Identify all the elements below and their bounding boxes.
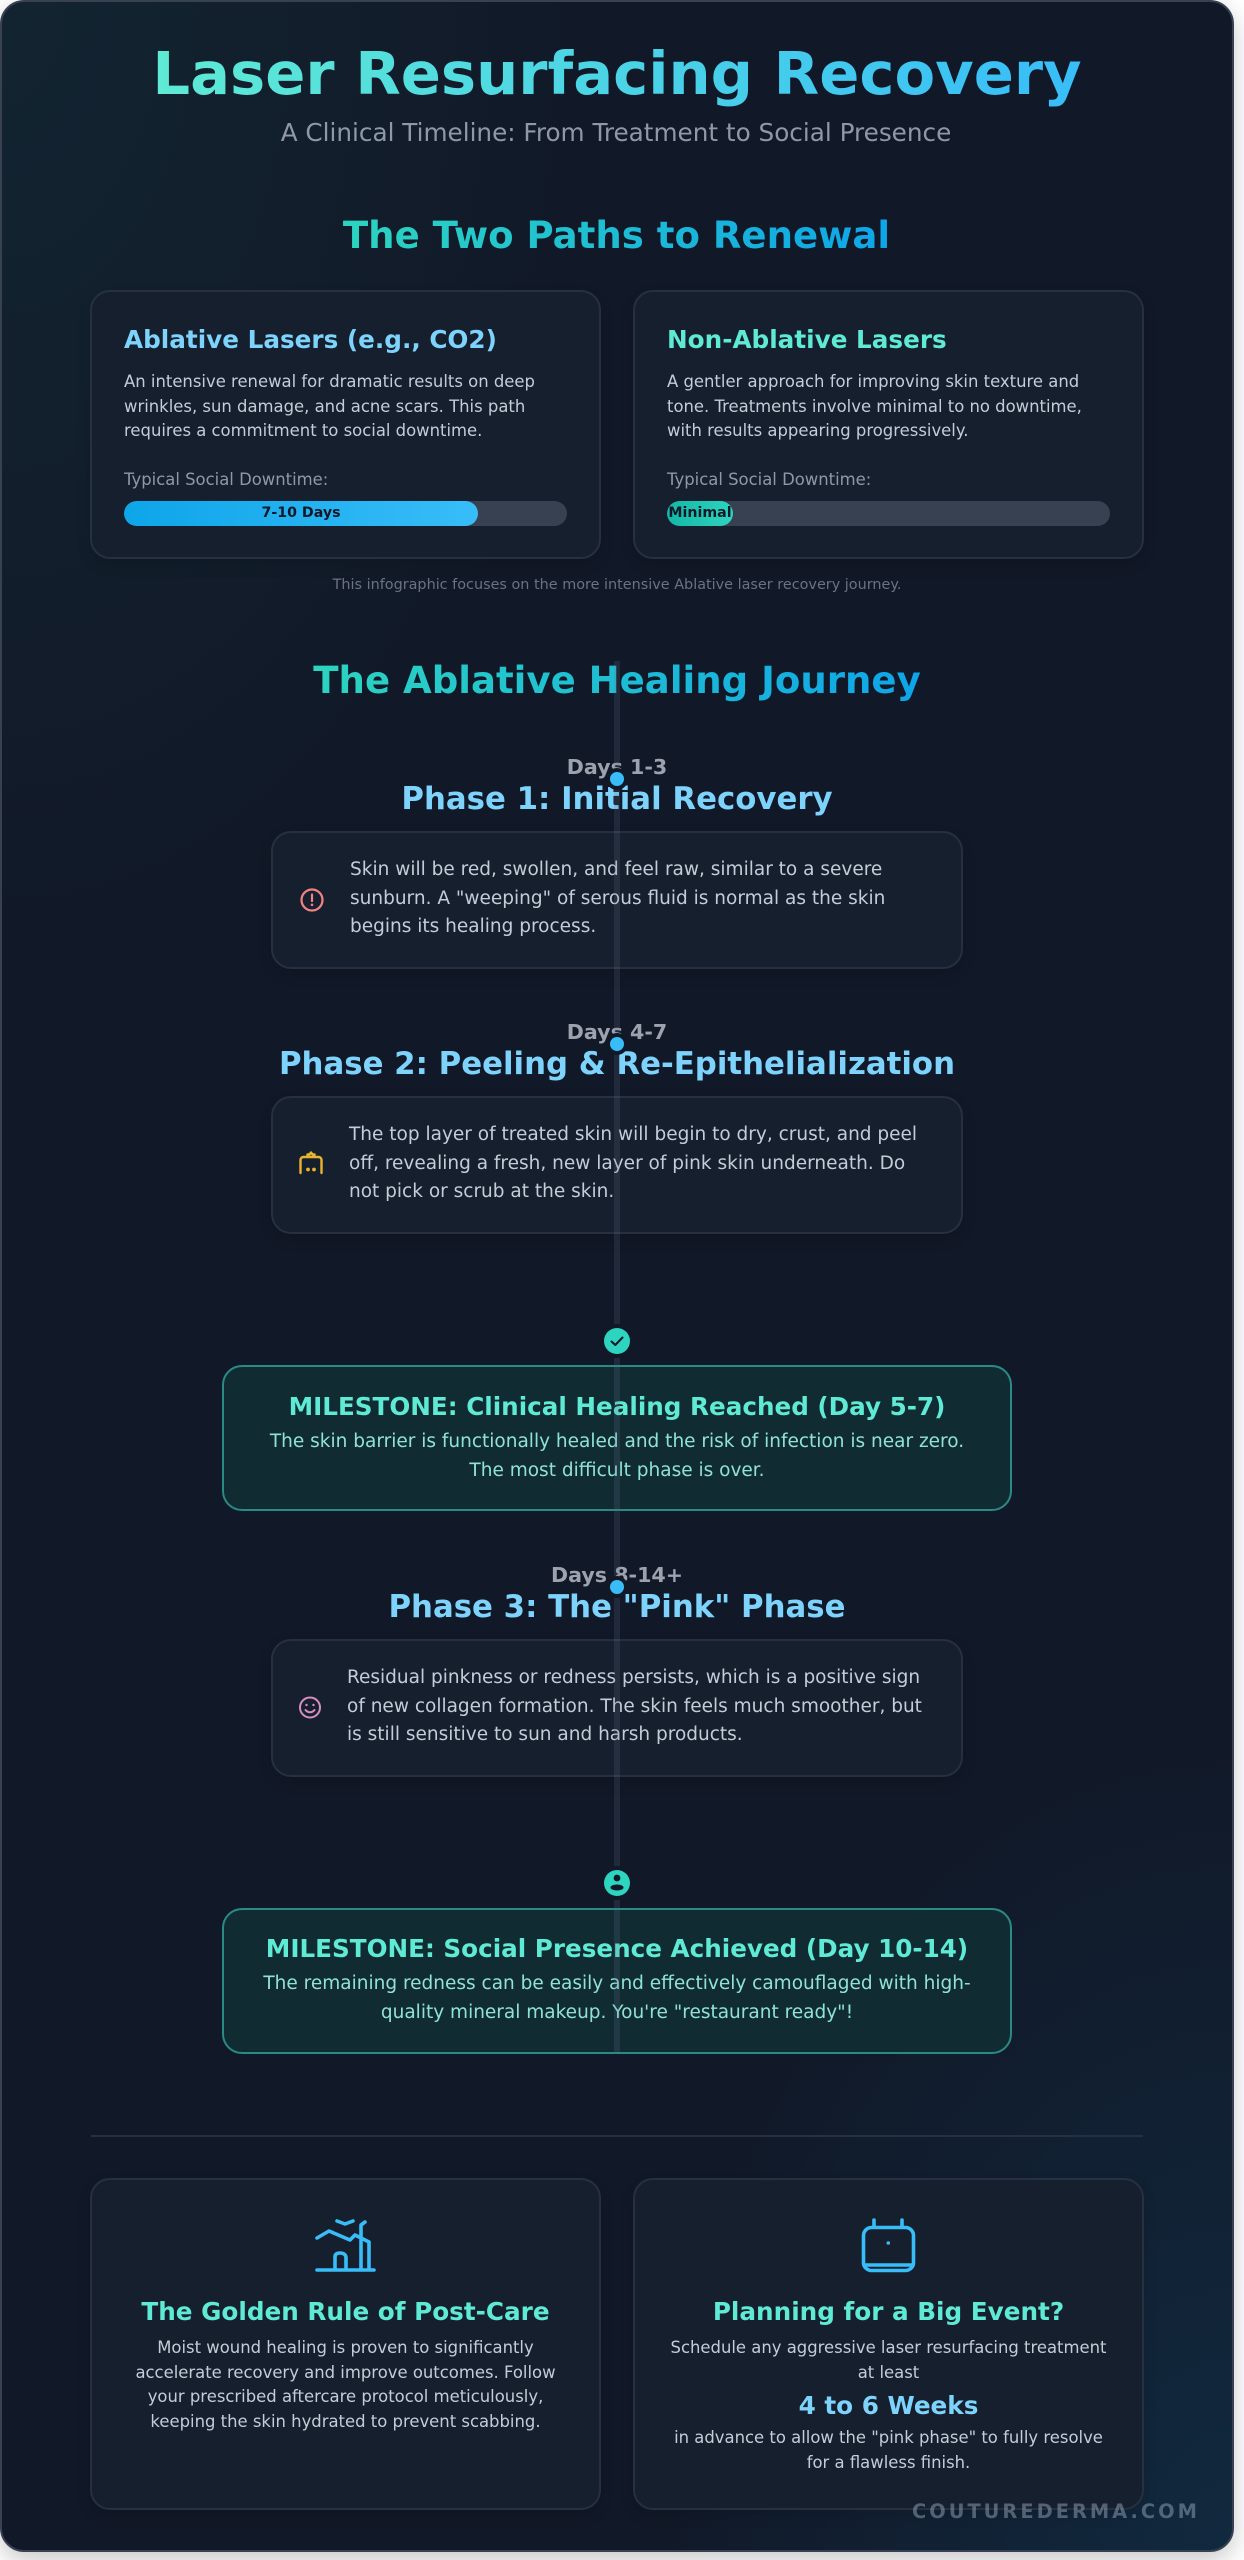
milestone icon: person <box>604 1870 630 1896</box>
text: non-ablative description: A gentler approach for improving skin texture and <box>667 372 1079 391</box>
text: phase 3: is still sensitive to sun and harsh products. <box>347 1724 743 1745</box>
milestone 1 text <box>270 1431 964 1480</box>
text: big event outro: in advance to allow the "pink phase" to fully resolve <box>674 2428 1103 2447</box>
text: ablative description: An intensive renewal for dramatic results on deep <box>124 372 535 391</box>
text: big event intro <box>671 2338 1106 2382</box>
text: non-ablative description <box>667 372 1082 440</box>
heading: golden rule: The Golden Rule of Post-Care <box>141 2297 550 2326</box>
milestone 2 title: MILESTONE: Social Presence Achieved (Day 10-14) <box>266 1934 968 1963</box>
bar: ablative downtime: 7-10 Days <box>261 505 341 521</box>
bar: ablative downtime <box>124 501 567 526</box>
note: This infographic focuses on the more intensive Ablative laser recovery journey. <box>333 577 901 593</box>
text: big event outro: for a flawless finish. <box>807 2453 970 2472</box>
milestone 1 text: The most difficult phase is over. <box>469 1460 765 1480</box>
bar: non-ablative downtime: Minimal <box>668 505 732 521</box>
text: phase 3 <box>347 1667 922 1745</box>
phase 1 title: Phase 1: Initial Recovery <box>401 781 833 817</box>
heading: ablative: Ablative Lasers (e.g., CO2) <box>124 325 497 354</box>
text: ablative description: wrinkles, sun damage, and acne scars. This path <box>124 397 525 416</box>
heading: non-ablative: Non-Ablative Lasers <box>667 325 947 354</box>
text: big event intro: Schedule any aggressive laser resurfacing treatment <box>671 2338 1106 2357</box>
milestone 1 title: MILESTONE: Clinical Healing Reached (Day 5-7) <box>289 1392 945 1421</box>
milestone icon: check <box>604 1328 630 1354</box>
text: non-ablative description: with results appearing progressively. <box>667 421 968 440</box>
text: phase 1 <box>350 859 885 937</box>
phase 2 days: Days 4-7 <box>567 1020 667 1044</box>
icon: golden rule <box>315 2219 376 2272</box>
phase 1 days: Days 1-3 <box>567 755 667 779</box>
subtitle: A Clinical Timeline: From Treatment to Social Presence <box>281 118 951 147</box>
text: golden rule: accelerate recovery and improve outcomes. Follow <box>135 2363 556 2382</box>
highlight: 4 to 6 weeks: 4 to 6 Weeks <box>799 2391 978 2420</box>
divider <box>91 2135 1143 2137</box>
text: phase 2 <box>348 1124 917 1202</box>
text: golden rule: your prescribed aftercare protocol meticulously, <box>148 2387 543 2406</box>
text: ablative description <box>124 372 535 440</box>
timeline dot 2 <box>610 1037 624 1051</box>
milestone 2 text: The remaining redness can be easily and effectively camouflaged with high- <box>263 1973 971 1994</box>
icon: calendar <box>862 2218 916 2272</box>
text: phase 1: begins its healing process. <box>350 916 596 937</box>
panel: milestone 1 <box>222 1365 1012 1511</box>
heading: big event: Planning for a Big Event? <box>713 2297 1064 2326</box>
title: Laser Resurfacing Recovery <box>152 39 1082 108</box>
heading: journey: The Ablative Healing Journey <box>313 659 921 702</box>
milestone 1 text: The skin barrier is functionally healed and the risk of infection is near zero. <box>270 1431 964 1452</box>
panel: phase 1 <box>271 831 963 969</box>
bar: non-ablative downtime <box>667 501 1110 526</box>
text: phase 3: of new collagen formation. The skin feels much smoother, but <box>347 1696 922 1717</box>
timeline dot 3 <box>610 1580 624 1594</box>
watermark: COUTUREDERMA.COM <box>912 2500 1200 2523</box>
phase 3 title: Phase 3: The "Pink" Phase <box>388 1589 846 1625</box>
text: phase 1: sunburn. A "weeping" of serous fluid is normal as the skin <box>350 888 885 909</box>
panel: phase 2 <box>271 1096 963 1234</box>
text: non-ablative description: tone. Treatments involve minimal to no downtime, <box>667 397 1082 416</box>
panel: ablative lasers <box>90 290 601 559</box>
timeline line <box>614 661 620 2053</box>
panel: non-ablative lasers <box>633 290 1144 559</box>
heading: two paths: The Two Paths to Renewal <box>343 214 890 257</box>
milestone 2 text <box>263 1973 971 2022</box>
panel: milestone 2 <box>222 1908 1012 2054</box>
text: phase 2: The top layer of treated skin will begin to dry, crust, and peel <box>349 1124 917 1145</box>
text: phase 2: off, revealing a fresh, new layer of pink skin underneath. Do <box>349 1153 905 1174</box>
icon: peeling <box>299 1151 323 1174</box>
icon: smile <box>299 1696 321 1718</box>
milestone 2 text: quality mineral makeup. You're "restaurant ready"! <box>381 2002 853 2022</box>
text: golden rule: keeping the skin hydrated to prevent scabbing. <box>150 2412 541 2431</box>
panel: golden rule <box>90 2178 601 2510</box>
text: golden rule <box>135 2338 556 2431</box>
icon: alert <box>300 888 324 912</box>
panel: big event <box>633 2178 1144 2510</box>
text: phase 3: Residual pinkness or redness persists, which is a positive sign <box>347 1667 920 1688</box>
panel: phase 3 <box>271 1639 963 1777</box>
phase 2 title: Phase 2: Peeling & Re-Epithelialization <box>279 1046 955 1082</box>
label: ablative downtime: Typical Social Downtime: <box>124 470 328 489</box>
timeline dot 1 <box>610 772 624 786</box>
text: big event intro: at least <box>858 2363 919 2382</box>
text: ablative description: requires a commitment to social downtime. <box>124 421 482 440</box>
phase 3 days: Days 8-14+ <box>551 1563 683 1587</box>
text: phase 1: Skin will be red, swollen, and feel raw, similar to a severe <box>350 859 882 880</box>
text: golden rule: Moist wound healing is proven to significantly <box>157 2338 534 2357</box>
text: phase 2: not pick or scrub at the skin. <box>349 1181 614 1202</box>
text: big event outro <box>674 2428 1103 2472</box>
label: non-ablative downtime: Typical Social Downtime: <box>667 470 871 489</box>
